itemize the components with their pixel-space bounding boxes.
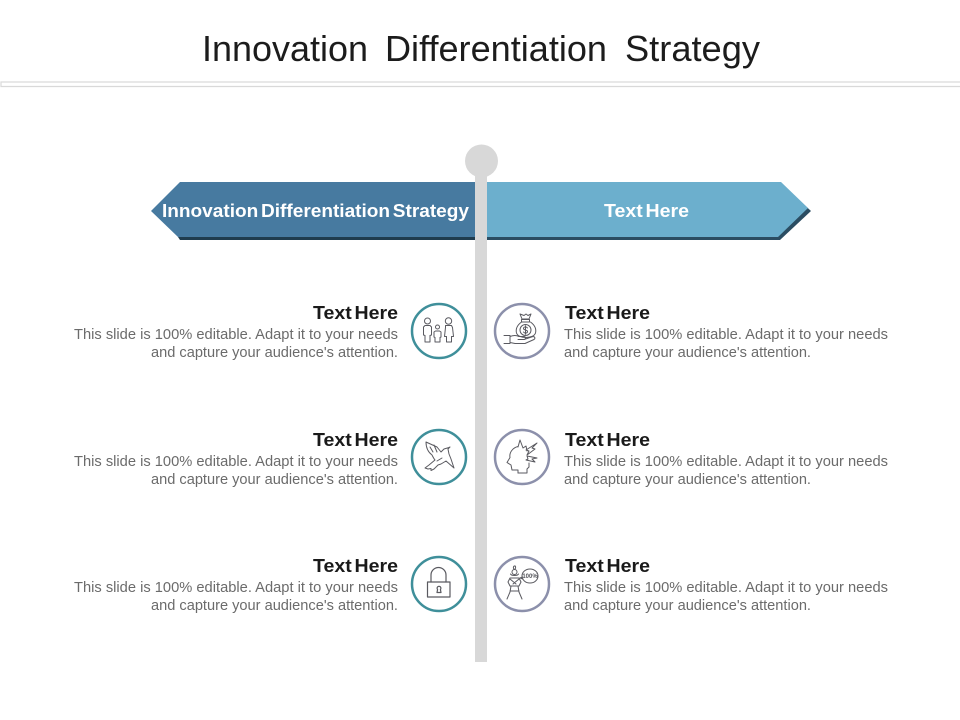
left text block 1 bbox=[74, 302, 398, 361]
title divider bbox=[1, 82, 960, 86]
right arrow banner bbox=[487, 182, 811, 240]
left text block 2 bbox=[74, 429, 398, 488]
title: Strategy bbox=[625, 28, 760, 69]
right arrow banner: Text Here bbox=[604, 200, 689, 221]
left text block 2: This slide is 100% editable. Adapt it to your needs bbox=[74, 454, 398, 470]
right text block 3: and capture your audience's attention. bbox=[564, 598, 811, 614]
icon: money bag in hand bbox=[495, 304, 549, 358]
right text block 3 bbox=[564, 555, 888, 614]
left text block 1: This slide is 100% editable. Adapt it to your needs bbox=[74, 327, 398, 343]
right text block 1: This slide is 100% editable. Adapt it to your needs bbox=[564, 327, 888, 343]
left text block 2: and capture your audience's attention. bbox=[151, 472, 398, 488]
icon label: 100%: 100% bbox=[522, 574, 538, 580]
left text block 3: and capture your audience's attention. bbox=[151, 598, 398, 614]
central pole bbox=[465, 144, 498, 662]
right text block 1 bbox=[564, 302, 888, 361]
right text block 2: and capture your audience's attention. bbox=[564, 472, 811, 488]
right text block 3: This slide is 100% editable. Adapt it to your needs bbox=[564, 580, 888, 596]
right text block 2 bbox=[564, 429, 888, 488]
left arrow banner bbox=[151, 182, 475, 240]
left text block 2: Text Here bbox=[313, 429, 398, 450]
right text block 1: and capture your audience's attention. bbox=[564, 345, 811, 361]
icon: family bbox=[412, 304, 466, 358]
icon: person with speech bubble bbox=[495, 557, 549, 611]
left arrow banner: Innovation Differentiation Strategy bbox=[162, 200, 470, 221]
icon: head with lightning bbox=[495, 430, 549, 484]
left text block 3: Text Here bbox=[313, 555, 398, 576]
right text block 2: Text Here bbox=[565, 429, 650, 450]
left text block 3 bbox=[74, 555, 398, 614]
left text block 1: Text Here bbox=[313, 302, 398, 323]
left text block 1: and capture your audience's attention. bbox=[151, 345, 398, 361]
icon: padlock bbox=[412, 557, 466, 611]
title bbox=[202, 28, 760, 69]
right text block 1: Text Here bbox=[565, 302, 650, 323]
right text block 2: This slide is 100% editable. Adapt it to your needs bbox=[564, 454, 888, 470]
icon: bird bbox=[412, 430, 466, 484]
left text block 3: This slide is 100% editable. Adapt it to your needs bbox=[74, 580, 398, 596]
right text block 3: Text Here bbox=[565, 555, 650, 576]
title: Innovation bbox=[202, 28, 368, 69]
title: Differentiation bbox=[385, 28, 607, 69]
